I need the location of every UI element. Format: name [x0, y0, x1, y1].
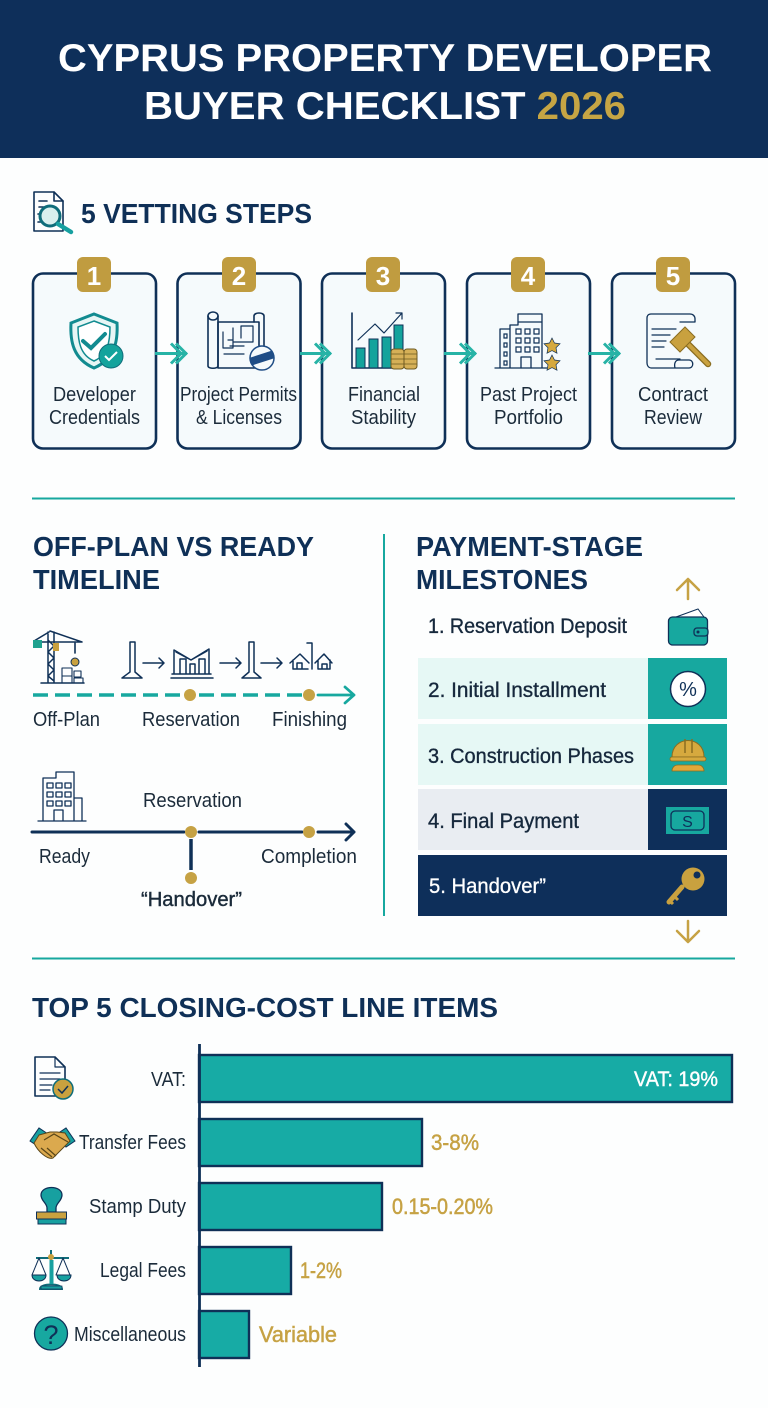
arrow: up [677, 579, 699, 599]
bar: VAT [199, 1055, 732, 1102]
icon: ready building [38, 772, 86, 821]
bar: stamp duty: 0.15-0.20% [392, 1194, 493, 1219]
bar chart [199, 1044, 732, 1367]
timeline: ready: Completion [261, 846, 357, 868]
title: BUYER CHECKLIST 2026 [144, 85, 626, 128]
arrow [143, 658, 164, 668]
title: CYPRUS PROPERTY DEVELOPER [58, 37, 712, 80]
milestone 5 [418, 855, 727, 916]
step card 3: 3 [376, 261, 390, 291]
label: Financial [348, 384, 420, 406]
label: Review [644, 407, 702, 429]
arrow 1 to 2 [155, 344, 187, 364]
bar: transfer fees [199, 1119, 479, 1166]
label [180, 384, 297, 429]
milestone 3: 3. Construction Phases [428, 745, 634, 768]
icon: scales of justice [32, 1250, 71, 1289]
milestone 2 [418, 658, 727, 719]
icon: document with magnifier [34, 192, 71, 232]
row labels [74, 1069, 186, 1346]
bar: legal fees: 1-2% [300, 1258, 342, 1283]
step card 4 [467, 257, 590, 448]
panel: off-plan vs ready timeline [32, 531, 357, 911]
bar: VAT: VAT: 19% [634, 1068, 718, 1091]
header banner [0, 0, 768, 158]
timeline: off-plan: Finishing [272, 709, 347, 731]
title [58, 37, 712, 128]
timeline: off-plan: Off-Plan [33, 709, 100, 731]
step card 2 [178, 257, 300, 448]
label [480, 384, 577, 429]
icon: building frame [171, 649, 213, 678]
icon: buildings and stars [495, 314, 560, 370]
bar: stamp duty [199, 1183, 493, 1230]
icon: contract and gavel [647, 314, 708, 368]
timeline: ready [32, 790, 357, 911]
row labels: Miscellaneous [74, 1324, 186, 1346]
bar: miscellaneous [199, 1311, 337, 1358]
label [638, 384, 708, 429]
heading: off-plan vs ready timeline [33, 531, 314, 595]
step card 2: 2 [232, 261, 246, 291]
label: Project Permits [180, 384, 297, 406]
heading: closing-cost line items: TOP 5 CLOSING-COST LINE ITEMS [32, 992, 498, 1023]
milestone 3 [418, 724, 727, 785]
bar: transfer fees: 3-8% [431, 1130, 479, 1155]
timeline: ready: Ready [39, 846, 90, 868]
icon: foundation column [242, 642, 261, 678]
row labels: Transfer Fees [79, 1132, 186, 1154]
arrow 4 to 5 [588, 344, 620, 364]
timeline: off-plan: Reservation [142, 709, 240, 731]
label: Portfolio [494, 407, 563, 429]
arrow [261, 658, 282, 668]
heading: off-plan vs ready timeline: OFF-PLAN VS READY [33, 531, 314, 562]
heading: payment-stage milestones: PAYMENT-STAGE [416, 531, 643, 562]
milestone 2: 2. Initial Installment [428, 679, 606, 702]
heading: off-plan vs ready timeline: TIMELINE [33, 564, 160, 595]
icon: tax document [35, 1057, 73, 1099]
bar: miscellaneous: Variable [259, 1322, 337, 1347]
section: 5 vetting steps [33, 192, 735, 448]
label [348, 384, 420, 429]
heading: payment-stage milestones [416, 531, 643, 595]
icon: growth chart and coins [352, 313, 417, 369]
milestone 1 [428, 609, 708, 645]
section: closing costs [30, 992, 732, 1367]
label: & Licenses [196, 407, 282, 429]
milestone 4 [418, 789, 727, 850]
arrow 3 to 4 [444, 344, 476, 364]
icon: percent [670, 672, 706, 706]
icon: key [669, 868, 704, 904]
icon: shield with check [71, 314, 123, 368]
timeline: ready: “Handover” [141, 889, 242, 911]
label [49, 384, 140, 429]
panel: payment-stage milestones [416, 531, 727, 942]
step card 5 [612, 257, 735, 448]
step card 1 [33, 257, 156, 448]
row labels: Legal Fees [100, 1260, 186, 1282]
timeline: ready: Reservation [143, 790, 242, 812]
icon: question mark: ? [43, 1320, 59, 1350]
icon: finished houses [290, 643, 332, 669]
milestone 5: 5. Handover” [429, 875, 546, 898]
step card 1: 1 [87, 261, 101, 291]
arrow [220, 658, 241, 668]
icon: wallet [668, 609, 708, 645]
heading: 5 vetting steps: 5 VETTING STEPS [81, 198, 312, 229]
bar: legal fees [199, 1247, 342, 1294]
step card 5: 5 [666, 261, 680, 291]
label: Developer [53, 384, 136, 406]
icon: tower crane [33, 631, 84, 683]
milestone 1: 1. Reservation Deposit [428, 615, 627, 638]
icon: percent: % [679, 679, 697, 701]
icon: blueprint with stamp [208, 312, 275, 370]
icon: handshake [30, 1128, 75, 1158]
timeline: off-plan [33, 687, 354, 731]
icon: hard hat [670, 739, 706, 771]
icon: banknote: S [682, 814, 693, 831]
icon: stamp [36, 1188, 66, 1224]
arrow 2 to 3 [300, 344, 331, 364]
icon: foundation column [122, 642, 142, 678]
milestone 4: 4. Final Payment [428, 810, 579, 833]
icon: question mark [34, 1317, 68, 1350]
icon: banknote [666, 807, 709, 834]
label: Past Project [480, 384, 577, 406]
step card 4: 4 [521, 261, 536, 291]
step card 3 [322, 257, 445, 448]
label: Contract [638, 384, 708, 406]
label: Credentials [49, 407, 140, 429]
row labels: Stamp Duty [89, 1196, 186, 1218]
row labels: VAT: [151, 1069, 186, 1091]
heading: payment-stage milestones: MILESTONES [416, 564, 588, 595]
label: Stability [351, 407, 416, 429]
arrow: down [677, 921, 699, 942]
